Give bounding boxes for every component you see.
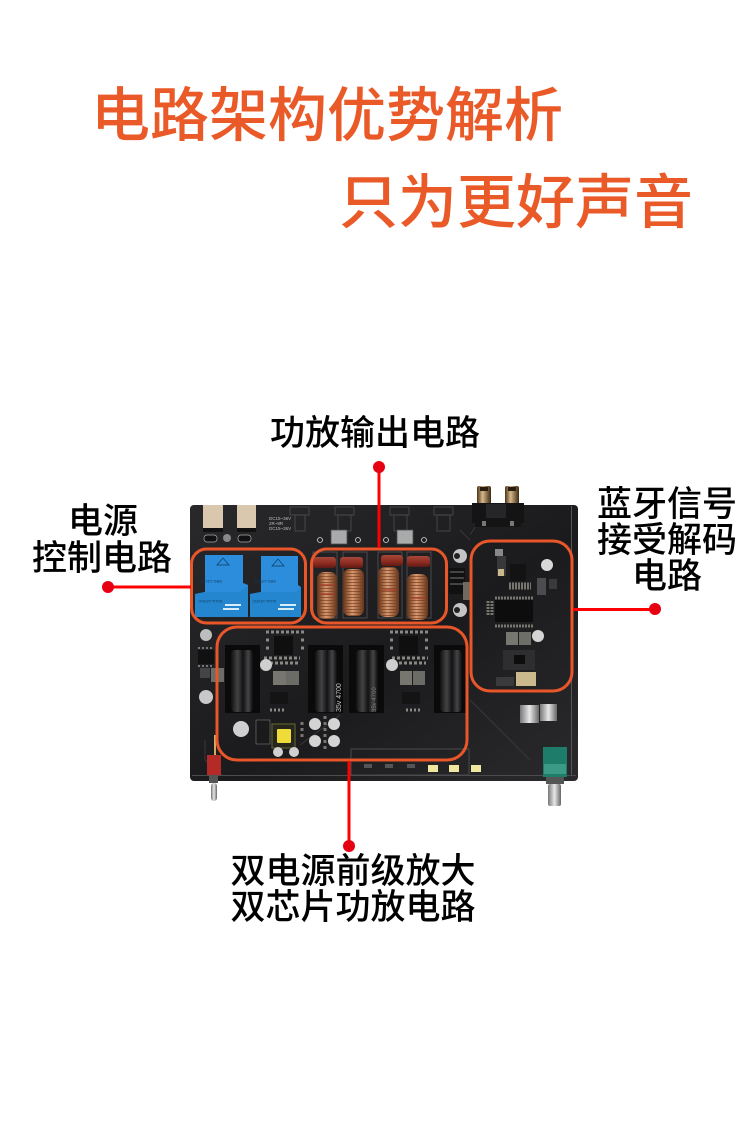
highlight frame: bluetooth decoder <box>471 541 572 691</box>
callout line: power control <box>102 581 191 593</box>
title line 1: 电路架构优势解析 <box>91 83 563 149</box>
volume potentiometer <box>543 747 567 806</box>
toggle switch <box>207 735 221 801</box>
label: bluetooth receive and decode circuit: 电路 <box>632 557 702 596</box>
amplifier chip sections <box>260 632 428 710</box>
highlight frame: power control <box>192 549 306 623</box>
title line 2: 只为更好声音 <box>339 170 693 236</box>
label: bluetooth receive and decode circuit: 蓝牙信号 <box>597 485 737 524</box>
film capacitors <box>313 555 430 568</box>
callout line: bluetooth <box>573 603 661 615</box>
board base <box>190 505 578 781</box>
small inductors lower right <box>520 704 557 723</box>
toroid inductors <box>317 567 428 620</box>
label: bluetooth receive and decode circuit: 接受解码 <box>597 521 737 560</box>
output terminals <box>290 507 453 544</box>
highlight frame: dual power and chip amp <box>217 627 467 760</box>
callout line: dual power amp <box>343 761 355 852</box>
label: dual power preamp and dual chip amp circuit: 双电源前级放大 <box>230 852 476 891</box>
main filter capacitors: 35v 4700 <box>372 687 378 712</box>
callout line: amplifier output <box>373 461 385 548</box>
USB-C style sockets at top: DC15~36V <box>269 516 291 521</box>
regulator section with transformer <box>233 716 340 757</box>
left side components <box>198 629 224 704</box>
main filter capacitors <box>225 645 467 713</box>
relays: SRD-12VDC <box>199 579 222 584</box>
relays <box>195 555 301 617</box>
highlight frame: amplifier output <box>312 549 446 623</box>
USB-C style sockets at top: 2R~8R <box>269 521 284 526</box>
bluetooth decoder section <box>488 549 557 686</box>
label: amplifier output circuit: 功放输出电路 <box>270 414 480 453</box>
main filter capacitors: 35v 4700 <box>336 683 343 712</box>
RCA socket body <box>472 503 524 527</box>
status LEDs <box>364 764 481 772</box>
label: power control circuit <box>32 502 172 578</box>
USB-C style sockets at top: DC15~36V <box>269 526 291 531</box>
label: dual power preamp and dual chip amp circuit: 双芯片功放电路 <box>230 888 476 927</box>
label: power control circuit: 控制电路 <box>32 539 172 578</box>
USB-C style sockets at top <box>203 505 291 542</box>
small caps right of inductors <box>449 549 472 617</box>
coil silk outlines <box>313 552 431 618</box>
label: dual power preamp and dual chip amp circuit <box>230 852 476 927</box>
label: bluetooth receive and decode circuit <box>597 485 737 596</box>
relays: SRD-12VDC <box>253 579 276 584</box>
label: power control circuit: 电源 <box>68 502 138 541</box>
relays: BJLA-12VDC <box>198 599 222 604</box>
icon: RCA connectors <box>477 486 519 506</box>
relays: BJLA-12VDC <box>252 599 276 604</box>
circuit board photo <box>190 486 578 806</box>
